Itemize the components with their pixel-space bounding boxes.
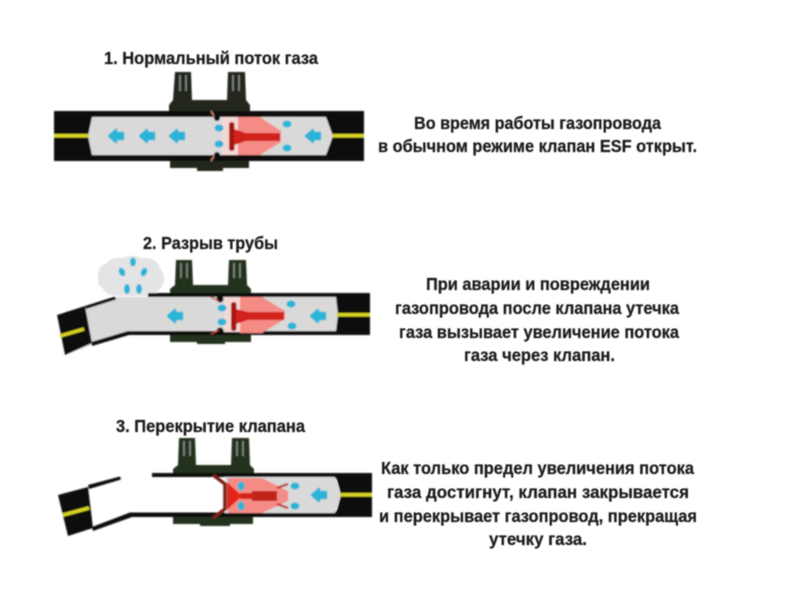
panel: pipe rupture <box>57 233 679 365</box>
description: step 2: газа вызывает увеличение потока <box>399 322 679 342</box>
description: step 3: Как только предел увеличения потока <box>381 458 694 478</box>
description: step 3 <box>379 458 697 549</box>
heading: step 1: 1. Нормальный поток газа <box>104 48 318 68</box>
description: step 2 <box>395 274 679 365</box>
description: step 1: в обычном режиме клапан ESF открыт. <box>378 136 697 156</box>
panel: normal gas flow <box>54 48 697 171</box>
description: step 1: Во время работы газопровода <box>414 113 661 133</box>
description: step 2: При аварии и повреждении <box>426 274 650 294</box>
description: step 1 <box>378 113 697 156</box>
heading: step 2: 2. Разрыв трубы <box>143 233 278 253</box>
diagram: closed valve <box>58 438 372 536</box>
diagram: open valve in intact pipe <box>54 72 364 171</box>
diagram: ruptured pipe with gas leak <box>57 256 370 355</box>
description: step 3: и перекрывает газопровод, прекращая <box>379 506 697 526</box>
description: step 2: газа через клапан. <box>464 345 615 365</box>
heading: step 3: 3. Перекрытие клапана <box>116 416 305 436</box>
description: step 3: газа достигнут, клапан закрывается <box>387 482 689 502</box>
description: step 3: утечку газа. <box>489 529 587 549</box>
panel: valve closure <box>58 416 697 549</box>
description: step 2: газопровода после клапана утечка <box>395 298 679 318</box>
gas cloud <box>98 256 164 296</box>
